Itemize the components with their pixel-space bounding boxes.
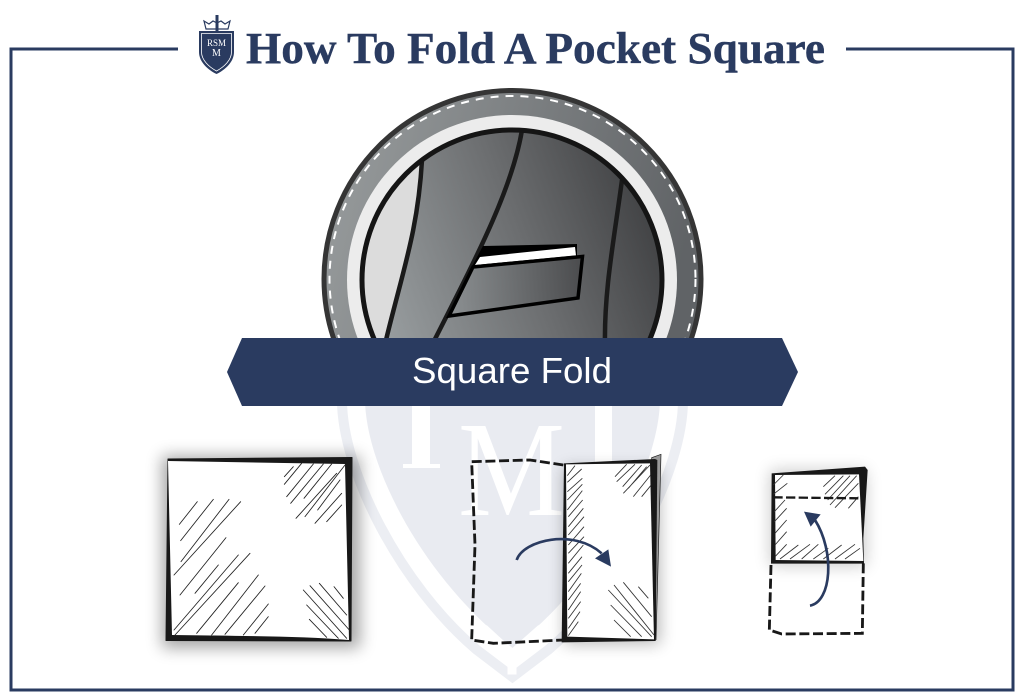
watermark shield: M <box>458 395 565 545</box>
dashed outline <box>472 460 563 643</box>
step 1: open square <box>162 456 360 648</box>
jacket pocket illustration <box>322 88 704 338</box>
icon: logo crest: RSM <box>207 38 226 48</box>
dashed outline <box>769 563 863 634</box>
banner label: Square Fold <box>412 350 612 391</box>
icon: logo crest <box>199 15 234 74</box>
step 2: fold in half <box>472 454 661 644</box>
step 3: fold upward <box>769 467 868 634</box>
fold line <box>773 494 858 502</box>
icon: logo crest: M <box>212 48 221 59</box>
pocket <box>449 256 582 316</box>
arrow <box>804 512 828 606</box>
banner <box>227 338 798 406</box>
arrow <box>517 539 611 567</box>
watermark shield <box>342 395 683 677</box>
title: How To Fold A Pocket Square <box>246 24 825 73</box>
pocket square <box>472 244 577 266</box>
